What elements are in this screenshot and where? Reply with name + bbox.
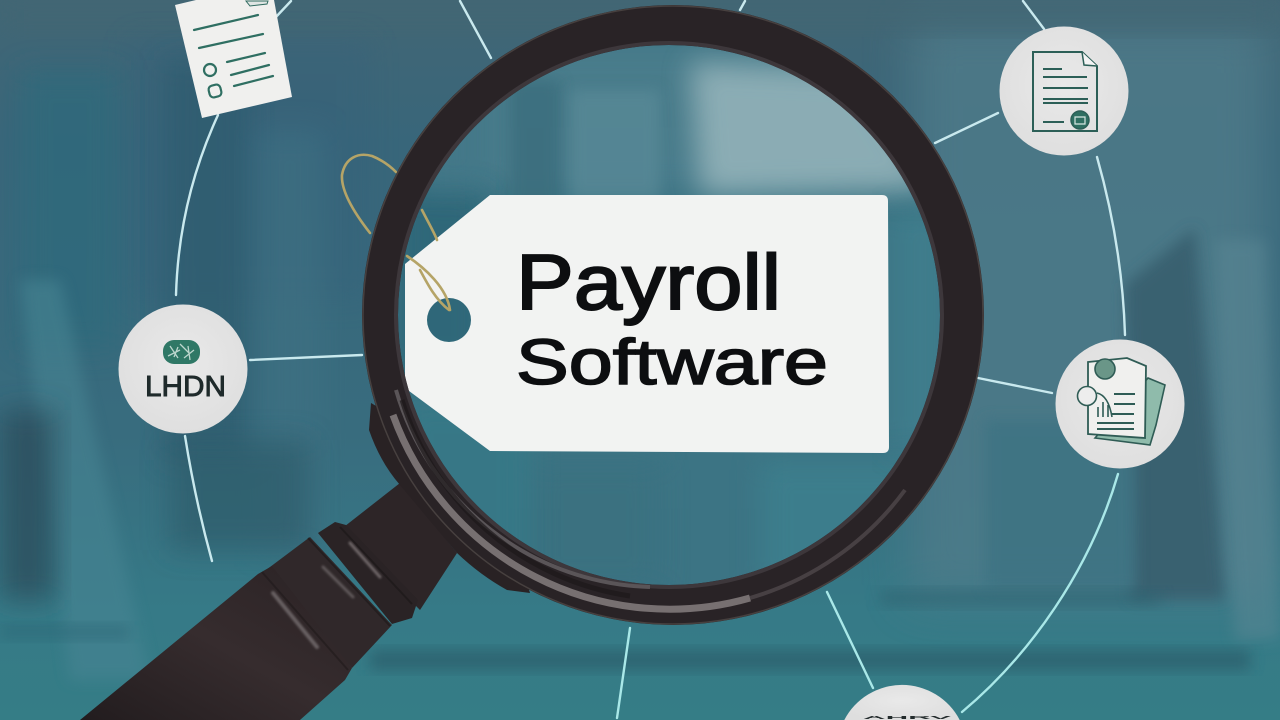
magnifier ring (362, 5, 984, 625)
tag text: Software: Software (516, 326, 828, 398)
ring boss and handle socket (369, 403, 530, 593)
network connector lines (176, 1, 1125, 718)
magnifier lens view (410, 45, 940, 560)
tag text: Payroll: Payroll (516, 238, 781, 326)
node: report stack (1056, 340, 1184, 468)
node: LHDN (118, 304, 248, 434)
node: certificate document (1000, 26, 1128, 156)
icon: LHDN emblem (163, 340, 200, 364)
price tag (405, 195, 889, 453)
node: bottom badge partly cropped (844, 685, 960, 720)
label: LHDN: LHDN (145, 371, 226, 403)
tag string behind ring (342, 155, 396, 233)
tag string on tag (407, 210, 450, 310)
magnifier handle (80, 483, 457, 720)
icon: checklist document (175, 0, 292, 118)
label: cropped badge text: AHRV (863, 715, 951, 720)
icon: report pages (1078, 358, 1165, 445)
icon: certificate (1033, 52, 1097, 131)
